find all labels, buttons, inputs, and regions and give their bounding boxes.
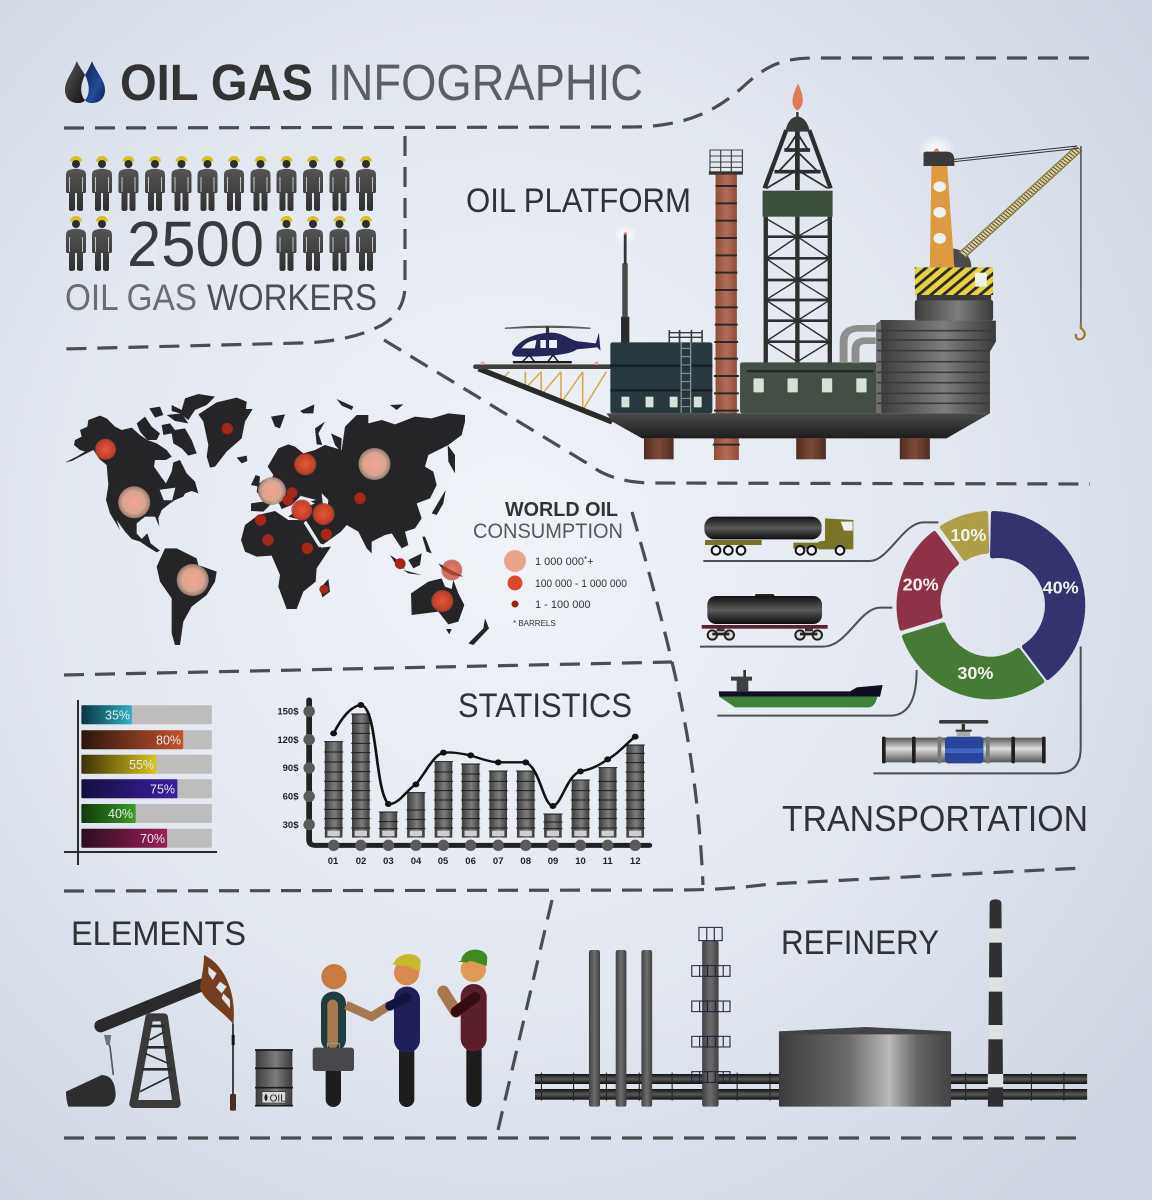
- consumption bubbles: [95, 423, 462, 612]
- map cutouts: lakes and seas: [151, 245, 328, 547]
- y axis labels: 120$: [277, 735, 299, 746]
- bar labels: 80%: [156, 734, 181, 748]
- oil barrel: OIL: [270, 1093, 286, 1104]
- heading: transportation: TRANSPORTATION: [782, 798, 1088, 839]
- panel: workers: [65, 156, 377, 318]
- legend: world oil consumption: * BARRELS: [513, 619, 556, 628]
- icon: oil and gas drops: [65, 61, 105, 103]
- heading: statistics: STATISTICS: [458, 687, 632, 725]
- crane: [915, 134, 1085, 339]
- illustration: refinery: [535, 899, 1087, 1107]
- person with green hat: [443, 950, 487, 1099]
- worker icons: [66, 156, 376, 271]
- oil barrel: [255, 1049, 293, 1106]
- heading: refinery: REFINERY: [781, 924, 939, 962]
- vertical columns: [589, 950, 652, 1107]
- workers count: 2500: [127, 208, 264, 280]
- workers label: [65, 276, 377, 318]
- pump jack: [66, 955, 236, 1111]
- barrel columns: [324, 714, 645, 838]
- map: the Americas and Greenland: [65, 394, 253, 645]
- heading: elements: ELEMENTS: [71, 915, 246, 953]
- bar labels: 40%: [108, 807, 133, 821]
- workers label: WORKERS: [207, 276, 377, 318]
- connector lines: [700, 522, 1081, 773]
- title: OIL GAS: [120, 54, 313, 111]
- illustration: oil platform: [473, 83, 1085, 460]
- y axis labels: 90$: [283, 763, 299, 774]
- barrel chart: monthly price: [277, 700, 649, 867]
- x axis labels: [328, 856, 640, 867]
- heading: oil platform: OIL PLATFORM: [466, 182, 691, 220]
- y axis labels: 60$: [283, 792, 299, 802]
- title: INFOGRAPHIC: [328, 54, 643, 111]
- icon: oil tanker ship: [719, 670, 883, 707]
- flare column: [709, 150, 743, 460]
- y axis labels: 30$: [283, 820, 299, 831]
- x axis labels: 12: [630, 856, 640, 867]
- legend: world oil consumption: WORLD OIL: [505, 498, 618, 521]
- gray drum: [876, 320, 996, 413]
- chart axes: [309, 700, 649, 845]
- storage tank: [779, 1027, 951, 1107]
- icon: pipeline valve: [882, 720, 1046, 763]
- x axis labels: 01: [328, 856, 339, 867]
- legend: world oil consumption: [473, 498, 627, 628]
- price line: [330, 702, 639, 809]
- x axis labels: 02: [356, 856, 366, 867]
- antenna: [614, 224, 637, 343]
- bar tracks: [81, 705, 212, 848]
- person with yellow hat: [390, 954, 421, 1099]
- bar fills: [81, 705, 183, 848]
- legend: world oil consumption: *: [584, 555, 587, 564]
- panel: world map: [65, 245, 489, 645]
- distillation tower: [692, 927, 730, 1107]
- panel: elements: [66, 950, 487, 1111]
- x axis labels: 06: [465, 856, 476, 867]
- bar labels: 70%: [140, 832, 165, 846]
- x axis labels: 04: [411, 856, 422, 867]
- green module: [740, 362, 880, 413]
- helicopter: [505, 326, 600, 363]
- donut labels: [903, 525, 1079, 683]
- legend: world oil consumption: 1 - 100 000: [535, 599, 591, 611]
- donut labels: 40%: [1043, 577, 1079, 597]
- bar labels: 75%: [150, 782, 175, 796]
- legend: world oil consumption: 1 000 000: [535, 556, 584, 568]
- x axis labels: 05: [438, 856, 449, 867]
- legend: world oil consumption: 100 000 - 1 000 000: [535, 578, 627, 590]
- donut labels: 10%: [950, 525, 986, 545]
- bar axes: [64, 700, 217, 865]
- person with briefcase: [313, 964, 390, 1099]
- x axis labels: 08: [520, 856, 531, 867]
- chimney: [988, 899, 1003, 1107]
- workers label: OIL GAS: [65, 276, 197, 318]
- bar labels: 55%: [129, 758, 154, 772]
- legend: world oil consumption: +: [587, 556, 594, 568]
- y axis labels: 150$: [277, 706, 299, 718]
- hull: [606, 413, 990, 438]
- title: [65, 54, 643, 111]
- map: Europe, Africa, Asia and Oceania: [241, 399, 489, 645]
- x axis labels: 10: [575, 856, 586, 867]
- axis ticks: [303, 706, 641, 851]
- teal module: [610, 330, 712, 413]
- bar chart: percentages: [64, 700, 217, 865]
- donut labels: 20%: [903, 575, 939, 595]
- bar labels: [105, 708, 181, 846]
- panel: transportation: [700, 513, 1083, 773]
- x axis labels: 07: [493, 856, 503, 867]
- donut labels: 30%: [957, 663, 993, 683]
- derrick tower: [763, 83, 833, 363]
- x axis labels: 03: [383, 856, 394, 867]
- x axis labels: 11: [603, 856, 613, 867]
- legend: world oil consumption: CONSUMPTION: [473, 520, 623, 543]
- icon: tanker truck: [704, 517, 853, 555]
- gray pipes: [844, 328, 876, 362]
- helideck: [473, 362, 612, 422]
- donut chart: [899, 513, 1083, 697]
- bar labels: 35%: [105, 708, 130, 722]
- pipelines: [535, 1073, 1087, 1101]
- y axis labels: [277, 706, 299, 831]
- icon: rail tank car: [702, 594, 828, 640]
- platform legs: [644, 438, 930, 459]
- x axis labels: 09: [548, 856, 558, 867]
